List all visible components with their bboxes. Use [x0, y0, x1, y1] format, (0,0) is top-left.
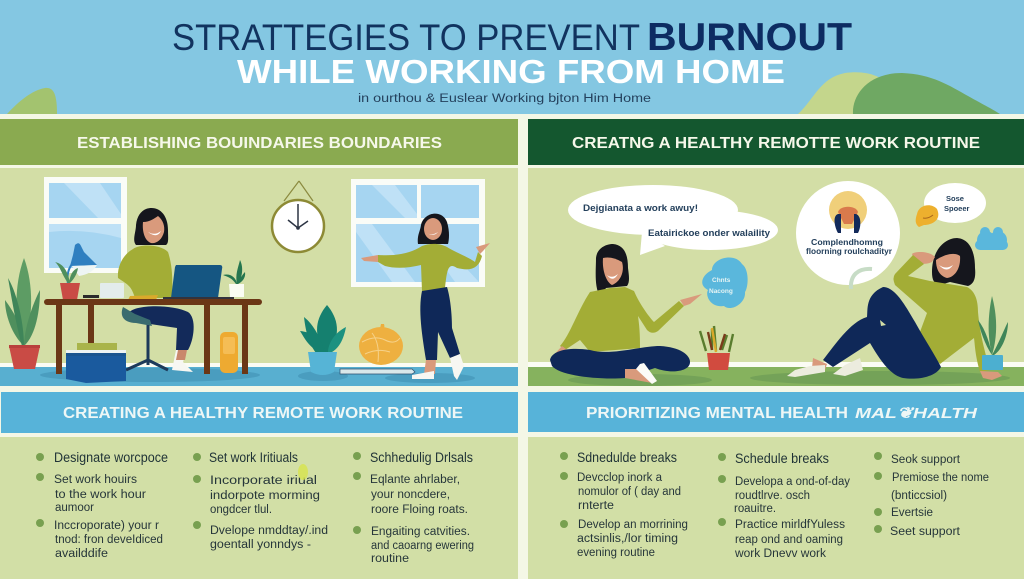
column 2: reap ond and oaming — [735, 534, 843, 546]
right window — [351, 179, 485, 287]
woman at desk — [83, 208, 194, 372]
column 3: Seet support — [890, 526, 961, 538]
panel: seated figures illustration — [528, 168, 1024, 386]
heading bar: creating routine: CREATING A HEALTHY REMOTE WORK ROUTINE — [63, 405, 463, 422]
column 1: aumoor — [55, 502, 94, 514]
column 1: evening routine — [577, 547, 655, 559]
panel heading: creating routine — [528, 119, 1024, 165]
floor book — [340, 369, 415, 374]
column 1: nomulor of ( day and — [578, 486, 681, 498]
hill: left — [7, 88, 57, 114]
column 2: Incorporate iriual — [210, 475, 317, 487]
column 1: Sdnedulde breaks — [577, 450, 677, 465]
column 2: Developa a ond-of-day — [735, 476, 850, 488]
pencil cup — [700, 326, 733, 370]
column 3: and caoarng ewering — [371, 540, 474, 552]
yellow vase — [220, 332, 238, 373]
woman reclining right — [787, 238, 1002, 380]
small blue cloud: left — [702, 257, 748, 308]
column 1 — [560, 450, 688, 559]
small blue cloud: left: Chnts — [712, 277, 731, 284]
sunrise icon — [829, 191, 867, 233]
column 3: Eqlante ahrlaber, — [370, 474, 460, 486]
column 3 — [874, 452, 989, 538]
column 1: availddife — [55, 548, 108, 560]
laptop — [163, 265, 234, 300]
column 2: roauitre. — [734, 503, 776, 515]
hill: right dark — [853, 73, 1000, 114]
woman seated left — [550, 244, 702, 384]
emoji icon — [916, 205, 938, 227]
desk lamp — [68, 243, 97, 284]
column 3: Seok support — [891, 454, 961, 466]
column 1: rnterte — [578, 500, 614, 512]
column 2: indorpote morming — [210, 490, 320, 502]
woven pouf — [359, 324, 403, 365]
title line 2: WHILE WORKING FROM HOME — [237, 53, 785, 90]
column 3: (bnticcsiol) — [891, 490, 947, 502]
speech bubble: right: floorning roulchadityr — [806, 246, 893, 256]
column 3: your noncdere, — [371, 489, 450, 501]
heading bar: creating routine — [1, 392, 518, 433]
column 3: Engaiting catvities. — [371, 526, 470, 538]
speech bubble: left — [568, 185, 778, 255]
plant: right potted — [978, 296, 1008, 370]
plant: desk small — [55, 262, 80, 300]
plant: desk right — [223, 260, 245, 297]
left window — [44, 177, 127, 273]
column 1: tnod: fron deveIdiced — [55, 534, 163, 546]
column 2: ongdcer tlul. — [210, 504, 272, 516]
column 2 — [718, 451, 850, 560]
column 1: Develop an morrining — [578, 519, 688, 531]
column 1: Inccroporate) your r — [54, 520, 159, 532]
panel heading: creating routine: CREATNG A HEALTHY REMOTTE WORK ROUTINE — [572, 135, 980, 152]
speech bubble: left: Eatairickoe onder walaility — [648, 228, 770, 238]
plant: tall left — [5, 258, 40, 369]
column 1 — [36, 450, 168, 560]
column 3: roore Floing roats. — [371, 504, 468, 516]
column 2: Practice mirldfYuless — [735, 519, 845, 531]
column 3: Evertsie — [891, 507, 933, 519]
title burnout: BURNOUT — [647, 16, 852, 59]
wall clock — [272, 181, 324, 252]
panel heading: establishing boundaries: ESTABLISHING BOUINDARIES BOUNDARIES — [77, 135, 442, 152]
column 3 — [353, 450, 474, 565]
column 1: actsinlis,/lor timing — [577, 533, 678, 545]
column 1: Designate worcpoce — [54, 450, 168, 465]
column 2 — [193, 450, 328, 551]
speech bubble: small: Spoeer — [944, 204, 970, 213]
panel: home office illustration — [0, 168, 518, 386]
heading bar: prioritizing mental health: PRIORITIZING MENTAL HEALTH — [586, 405, 848, 422]
column 3: Premiose the nome — [892, 472, 989, 484]
title line 1: STRATTEGIES TO PREVENT — [172, 17, 640, 58]
small blue cloud: right — [975, 227, 1008, 250]
column 2: roudtlrve. osch — [735, 490, 810, 502]
small blue cloud: left: Nacong — [709, 288, 733, 295]
speech bubble: small — [924, 183, 986, 223]
woman standing — [361, 214, 490, 380]
speech bubble: right: Complendhomng — [811, 237, 883, 247]
panel: mental health list — [528, 437, 1024, 579]
yellow highlight mark — [298, 464, 308, 480]
heading bar: prioritizing mental health: MAL❦HALTH — [855, 405, 978, 422]
column 1: to the work hour — [55, 489, 146, 501]
plant: teal floor — [300, 305, 346, 375]
hill: right light — [798, 72, 890, 114]
heading bar: prioritizing mental health — [528, 392, 1024, 432]
speech bubble: right — [796, 181, 900, 289]
column 2: Schedule breaks — [735, 451, 829, 466]
column 2: goentall yonndys - — [210, 539, 311, 551]
desk — [44, 299, 262, 374]
subtitle: in ourthou & Euslear Working bjton Him Home — [358, 93, 651, 105]
panel heading: establishing boundaries — [0, 119, 518, 165]
column 2: work Dnevv work — [734, 548, 826, 560]
column 1: Devcclop inork a — [577, 472, 663, 484]
column 1: Set work houirs — [54, 474, 137, 486]
column 2: Dvelope nmddtay/.ind — [210, 525, 328, 537]
panel: routine list — [0, 437, 518, 579]
column 3: routine — [371, 553, 409, 565]
speech bubble: left: Dejgianata a work awuy! — [583, 203, 698, 213]
column 3: Schhedulig Drlsals — [370, 450, 473, 465]
storage box — [66, 343, 126, 383]
column 2: Set work Iritiuals — [209, 450, 298, 465]
header banner — [0, 0, 1024, 114]
speech bubble: small: Sose — [946, 194, 964, 203]
